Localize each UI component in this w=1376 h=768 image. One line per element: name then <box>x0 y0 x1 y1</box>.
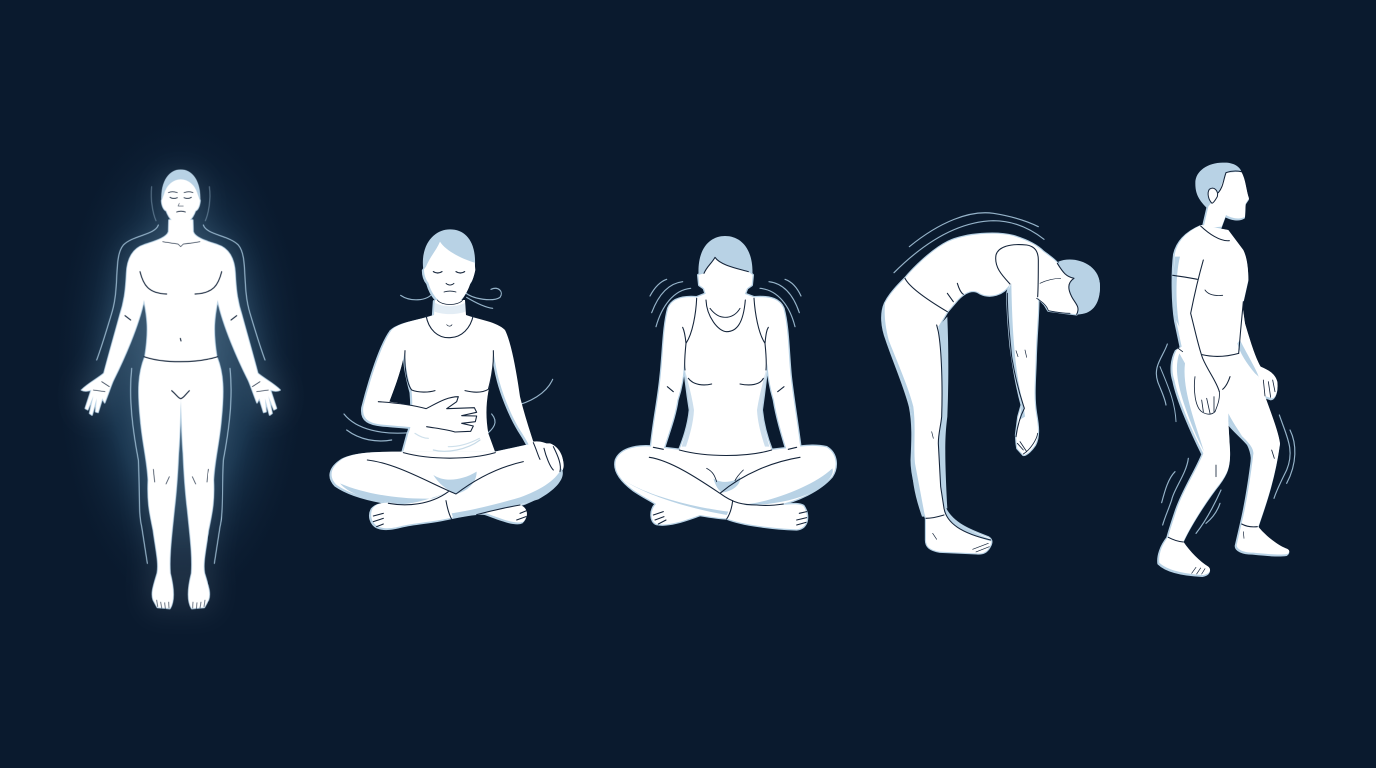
breath and motion waves <box>344 288 553 441</box>
spine curve waves <box>894 213 1044 273</box>
body silhouette <box>615 257 836 529</box>
body silhouette <box>82 177 280 608</box>
belly breath lines <box>415 433 480 451</box>
hair <box>1058 259 1100 314</box>
energy waves <box>97 187 265 563</box>
hair cap over forehead <box>164 173 197 193</box>
hair <box>1195 163 1241 209</box>
shoulder tension waves <box>650 279 801 327</box>
hair <box>698 236 752 277</box>
figure 4: forward fold <box>882 213 1100 553</box>
leg tremor waves <box>1156 344 1295 533</box>
limb shading <box>882 283 1025 541</box>
body lines <box>905 245 1078 552</box>
figure 1: standing, radiant body <box>51 110 311 620</box>
figure 2: seated diaphragm breathing <box>330 229 564 529</box>
figure 3: seated with tense shoulders <box>615 236 836 529</box>
face and anatomy lines <box>367 272 560 527</box>
body silhouette <box>1158 172 1289 576</box>
figure 5: standing with trembling legs <box>1156 163 1295 576</box>
facial and anatomy lines <box>93 192 268 609</box>
leg shading <box>623 370 833 515</box>
limb shading <box>1174 257 1259 470</box>
body lines <box>1168 171 1275 574</box>
body silhouette <box>882 234 1100 553</box>
body silhouette <box>330 242 564 529</box>
background glow <box>51 110 311 620</box>
hair <box>423 229 475 270</box>
soft body halo <box>82 177 280 608</box>
ear <box>1208 188 1218 203</box>
hair <box>161 169 200 202</box>
leg and arm shading <box>340 303 563 518</box>
body lines <box>649 257 807 525</box>
